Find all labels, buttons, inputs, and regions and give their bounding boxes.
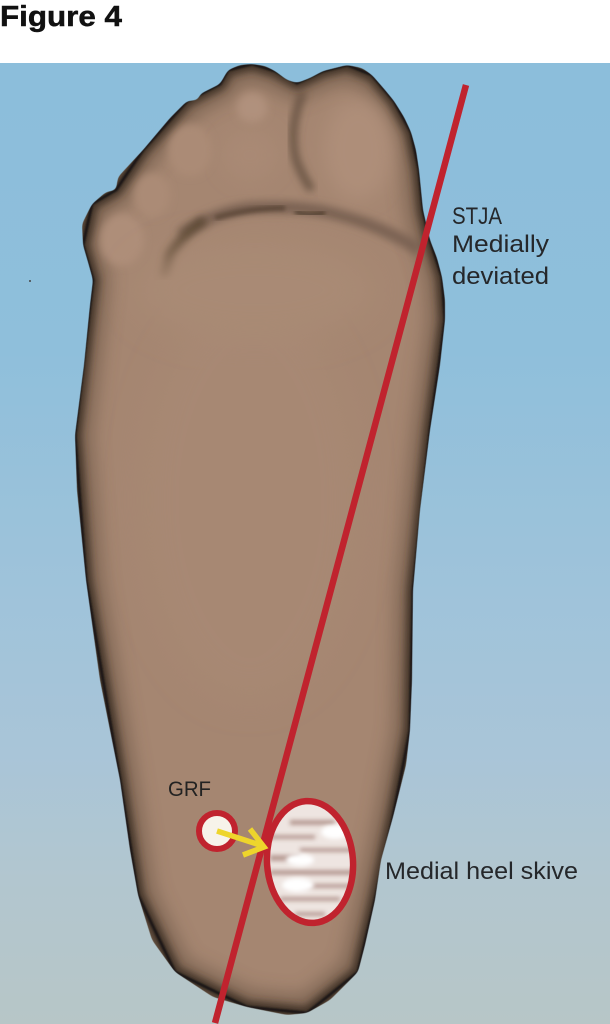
label: STJA medially deviated (452, 203, 549, 290)
yellow arrow (217, 829, 264, 855)
label: STJA medially deviated: deviated (452, 263, 549, 290)
medial heel skive (263, 798, 357, 926)
label: STJA medially deviated: Medially (452, 231, 549, 258)
STJA axis line (215, 85, 466, 1023)
label: GRF: GRF (168, 778, 211, 801)
GRF point (199, 813, 235, 849)
toe and arch shading (98, 91, 420, 273)
stray dot (29, 280, 31, 282)
edge shadow (75, 64, 445, 1013)
title: Figure 4 (0, 1, 122, 33)
label: medial heel skive: Medial heel skive (385, 858, 578, 885)
foot (60, 55, 460, 1024)
label: STJA medially deviated: STJA (452, 203, 502, 230)
wide edge shading (75, 64, 445, 1013)
